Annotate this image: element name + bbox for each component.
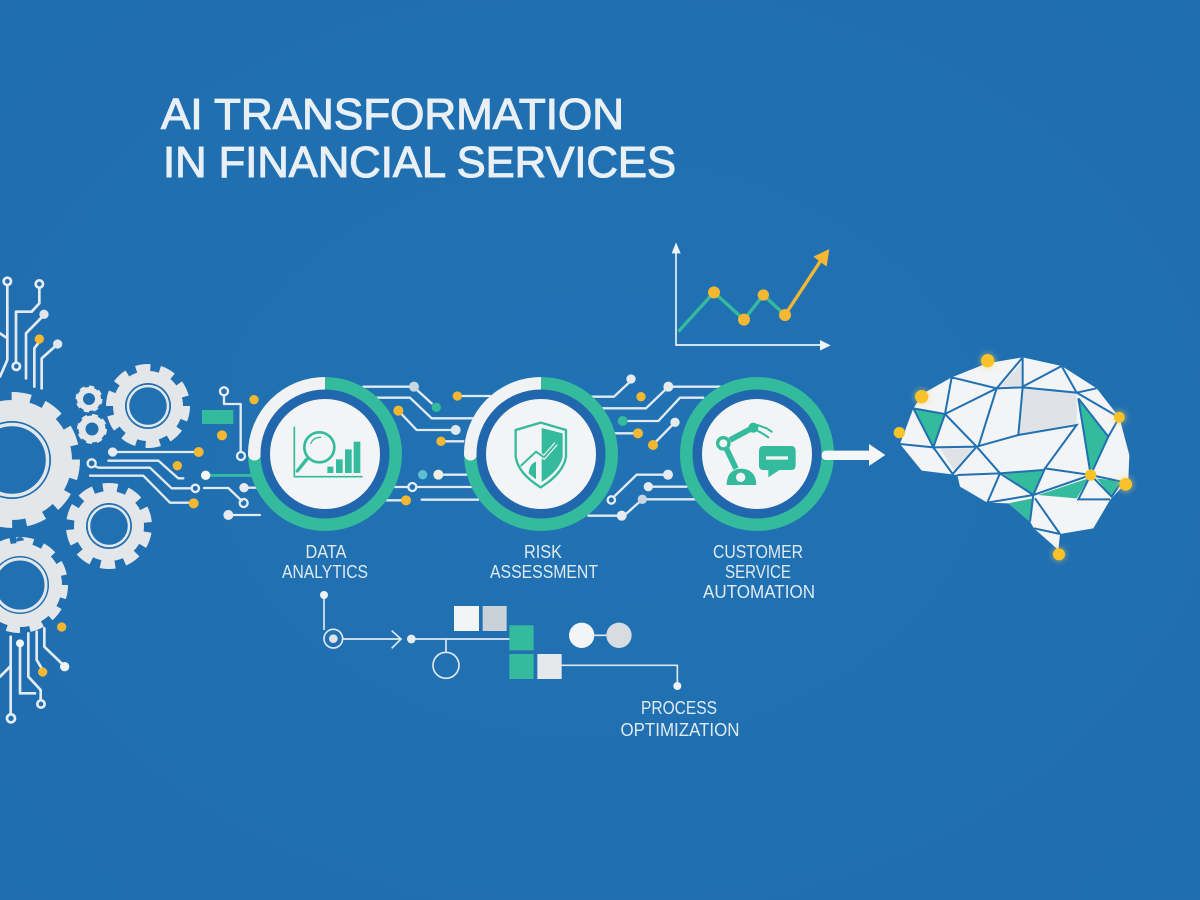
label: process optimization: PROCESS bbox=[641, 698, 717, 718]
label: customer service automation: AUTOMATION bbox=[703, 582, 815, 602]
label: risk assessment: RISK bbox=[524, 542, 562, 562]
circuit lines between second and third circles bbox=[588, 374, 720, 521]
process flow diagram bbox=[320, 591, 681, 690]
gear: middle bbox=[66, 483, 152, 569]
label: risk assessment bbox=[490, 542, 598, 582]
facet lines bbox=[900, 357, 1122, 534]
label: data analytics: ANALYTICS bbox=[282, 562, 368, 582]
middle circuit traces bbox=[88, 387, 260, 520]
label: customer service automation: CUSTOMER bbox=[713, 542, 803, 562]
panel: customer service automation circle bbox=[686, 384, 828, 524]
flow lines bbox=[324, 595, 677, 685]
icon: shield with trend arrow bbox=[516, 423, 566, 487]
gear: small top bbox=[78, 388, 100, 410]
chart: rising trend line bbox=[672, 242, 831, 351]
icon: magnifier over bar chart bbox=[294, 427, 362, 477]
title: IN FINANCIAL SERVICES bbox=[163, 138, 676, 187]
shaded facets bbox=[940, 362, 1077, 472]
teal bar bbox=[202, 410, 233, 424]
label: data analytics: DATA bbox=[306, 542, 346, 562]
upper circuit traces bbox=[0, 278, 62, 388]
process squares bbox=[454, 606, 562, 679]
gear: lower left bbox=[0, 541, 64, 629]
panel: data analytics circle bbox=[248, 384, 396, 524]
title bbox=[161, 90, 676, 187]
lower circuit traces bbox=[0, 622, 69, 722]
label: customer service automation bbox=[703, 542, 815, 602]
label: risk assessment: ASSESSMENT bbox=[490, 562, 598, 582]
yellow nodes bbox=[894, 354, 1132, 560]
gears cluster bbox=[0, 368, 186, 629]
label: customer service automation: SERVICE bbox=[725, 562, 791, 582]
label: data analytics bbox=[282, 542, 368, 582]
green facets bbox=[913, 398, 1122, 522]
node glow bbox=[914, 353, 1133, 561]
circuit lines between first and second circles bbox=[363, 382, 490, 505]
icon: robot arm with speech bubble bbox=[718, 423, 796, 485]
gear: large bbox=[0, 397, 75, 523]
title: AI TRANSFORMATION bbox=[161, 90, 624, 139]
brain silhouette bbox=[900, 357, 1129, 550]
label: process optimization: OPTIMIZATION bbox=[620, 720, 740, 740]
gear: small bottom bbox=[79, 416, 105, 442]
panel: risk assessment circle bbox=[464, 384, 612, 524]
gear: upper bbox=[110, 368, 186, 444]
arrow: circles to brain bbox=[822, 444, 885, 466]
label: process optimization bbox=[620, 698, 740, 740]
circuit lines left of gears bbox=[0, 278, 260, 722]
brain network bbox=[894, 353, 1133, 561]
